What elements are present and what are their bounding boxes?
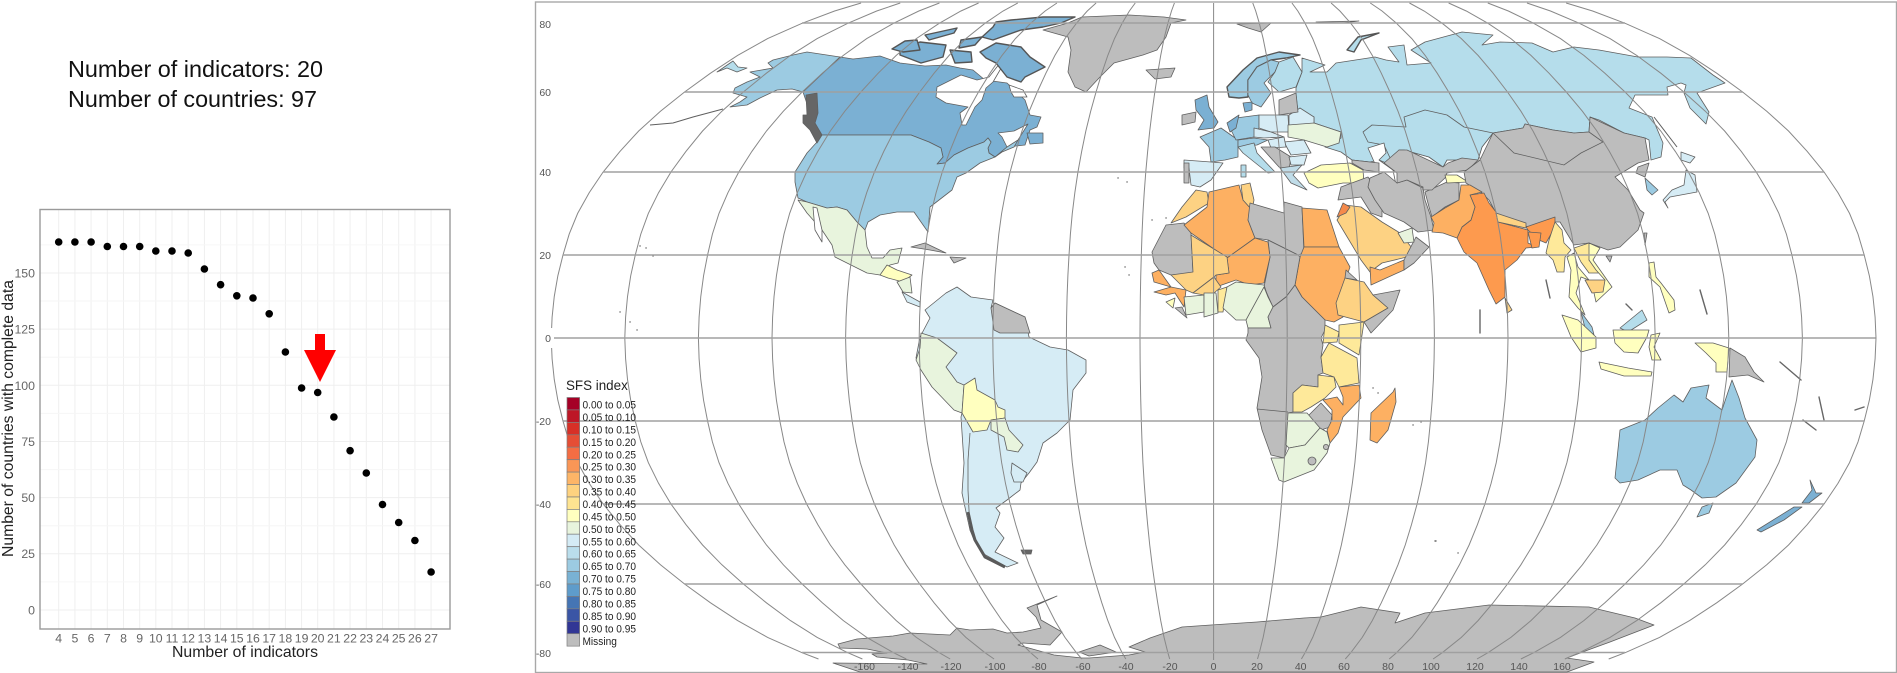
x axis tick labels: 26 <box>408 632 422 646</box>
text block: selected indicators and countries <box>68 56 323 112</box>
data points <box>55 238 435 576</box>
longitude labels: 60 <box>1338 661 1350 673</box>
South America <box>916 287 1086 567</box>
latitude labels: 0 <box>545 333 551 345</box>
x axis tick labels: 8 <box>120 632 127 646</box>
legend: SFS index: 0.20 to 0.25 <box>582 449 636 461</box>
legend: SFS index: 0.85 to 0.90 <box>582 610 636 623</box>
x axis tick labels: 21 <box>327 632 341 646</box>
longitude labels: 80 <box>1382 661 1394 673</box>
longitude labels: 100 <box>1422 661 1440 673</box>
North America <box>650 17 1075 307</box>
y axis tick labels: 100 <box>14 379 35 393</box>
longitude labels: -140 <box>897 661 919 673</box>
arrow: red arrow pointing to 20 indicators <box>304 334 336 382</box>
longitude labels: -60 <box>1075 661 1091 673</box>
latitude labels: -80 <box>536 648 551 660</box>
longitude labels: -80 <box>1031 661 1047 673</box>
latitude labels: 40 <box>539 167 551 179</box>
legend: SFS index <box>566 378 636 648</box>
legend: SFS index: 0.65 to 0.70 <box>582 561 636 573</box>
legend: SFS index: SFS index <box>566 378 628 393</box>
latitude labels: -20 <box>536 416 551 428</box>
South and East Asia <box>1431 117 1764 382</box>
legend: SFS index: 0.25 to 0.30 <box>582 461 636 474</box>
latitude labels: 20 <box>539 250 551 262</box>
map graticule: parallels <box>554 23 1876 652</box>
x axis tick labels: 10 <box>149 632 163 646</box>
x axis tick labels: 23 <box>359 632 373 646</box>
legend: SFS index: 0.15 to 0.20 <box>582 436 636 449</box>
map: countries coloured by SFS index <box>620 15 1864 672</box>
latitude labels: -60 <box>536 579 551 591</box>
small islands <box>620 178 1864 553</box>
longitude labels: 20 <box>1251 661 1263 673</box>
panel: world map frame <box>536 2 1896 672</box>
x axis tick labels: 7 <box>104 632 111 646</box>
legend: SFS index: 0.05 to 0.10 <box>582 412 636 424</box>
y axis tick labels: 75 <box>21 435 35 449</box>
longitude labels: 160 <box>1553 661 1571 673</box>
legend: SFS index: 0.75 to 0.80 <box>582 586 636 598</box>
latitude labels: 60 <box>539 87 551 99</box>
legend: SFS index: 0.45 to 0.50 <box>582 511 636 524</box>
Russia and Kazakhstan <box>1296 32 1725 185</box>
Antarctica <box>833 596 1654 672</box>
latitude labels: -40 <box>536 499 551 511</box>
legend: SFS index: 0.60 to 0.65 <box>582 548 636 561</box>
legend: SFS index: 0.70 to 0.75 <box>582 573 636 586</box>
legend: SFS index: 0.40 to 0.45 <box>582 499 636 511</box>
longitude labels: 0 <box>1211 661 1217 673</box>
x axis tick labels: 18 <box>279 632 292 646</box>
Europe <box>1182 52 1341 190</box>
x axis tick labels: 15 <box>230 632 244 646</box>
y axis tick labels: 150 <box>14 266 35 280</box>
x axis tick labels: 27 <box>424 632 438 646</box>
longitude labels: -20 <box>1162 661 1178 673</box>
x axis tick labels: 22 <box>343 632 357 646</box>
longitude labels: 40 <box>1295 661 1307 673</box>
longitude labels: -160 <box>854 661 875 673</box>
legend: SFS index: 0.80 to 0.85 <box>582 598 636 611</box>
legend: SFS index: 0.55 to 0.60 <box>582 536 636 548</box>
legend: SFS index: 0.30 to 0.35 <box>582 474 636 486</box>
x axis tick labels: 6 <box>88 632 95 646</box>
x axis tick labels: 13 <box>198 632 211 646</box>
y axis tick labels: 50 <box>21 491 35 505</box>
map graticule: meridians <box>551 3 1876 660</box>
longitude labels: 140 <box>1510 661 1528 673</box>
Middle East and Central Asia <box>1304 150 1478 285</box>
y axis tick labels <box>14 266 35 618</box>
panel: scatter plot of countries by number of indicators <box>0 210 450 661</box>
legend: SFS index: 0.35 to 0.40 <box>582 486 636 499</box>
Africa <box>1152 183 1400 482</box>
x axis tick labels: 14 <box>214 632 228 646</box>
x axis tick labels: 25 <box>392 632 406 646</box>
longitude labels: -40 <box>1118 661 1134 673</box>
legend: SFS index: 0.50 to 0.55 <box>582 523 636 536</box>
y axis tick labels: 125 <box>14 322 35 336</box>
legend: SFS index: 0.90 to 0.95 <box>582 623 636 635</box>
longitude labels: -100 <box>984 661 1006 673</box>
x axis tick labels: 16 <box>246 632 260 646</box>
legend: SFS index: Missing <box>582 635 617 648</box>
x axis tick labels: 5 <box>71 632 78 646</box>
x axis tick labels: 17 <box>262 632 276 646</box>
longitude labels: -120 <box>940 661 962 673</box>
x axis tick labels <box>55 632 438 646</box>
y axis title: Number of countries with complete data <box>0 280 17 557</box>
Greenland and Arctic <box>1043 15 1359 92</box>
y axis tick labels: 0 <box>28 604 35 618</box>
x axis tick labels: 9 <box>136 632 143 646</box>
longitude labels <box>854 661 1571 673</box>
legend: SFS index: 0.10 to 0.15 <box>582 424 636 437</box>
y axis tick labels: 25 <box>21 547 35 561</box>
text block: selected indicators and countries: Number of indicators: 20 <box>68 56 323 82</box>
Oceania <box>1615 380 1822 532</box>
x axis tick labels: 19 <box>295 632 309 646</box>
x axis tick labels: 12 <box>181 632 195 646</box>
x axis tick labels: 11 <box>166 632 179 646</box>
x axis tick labels: 24 <box>376 632 389 646</box>
legend: SFS index: 0.00 to 0.05 <box>582 399 636 412</box>
x axis title: Number of indicators <box>172 644 318 661</box>
longitude labels: 120 <box>1466 661 1484 673</box>
x axis tick labels: 4 <box>55 632 62 646</box>
text block: selected indicators and countries: Number of countries: 97 <box>68 86 317 112</box>
x axis tick labels: 20 <box>311 632 325 646</box>
latitude labels <box>536 19 551 660</box>
latitude labels: 80 <box>539 19 551 31</box>
